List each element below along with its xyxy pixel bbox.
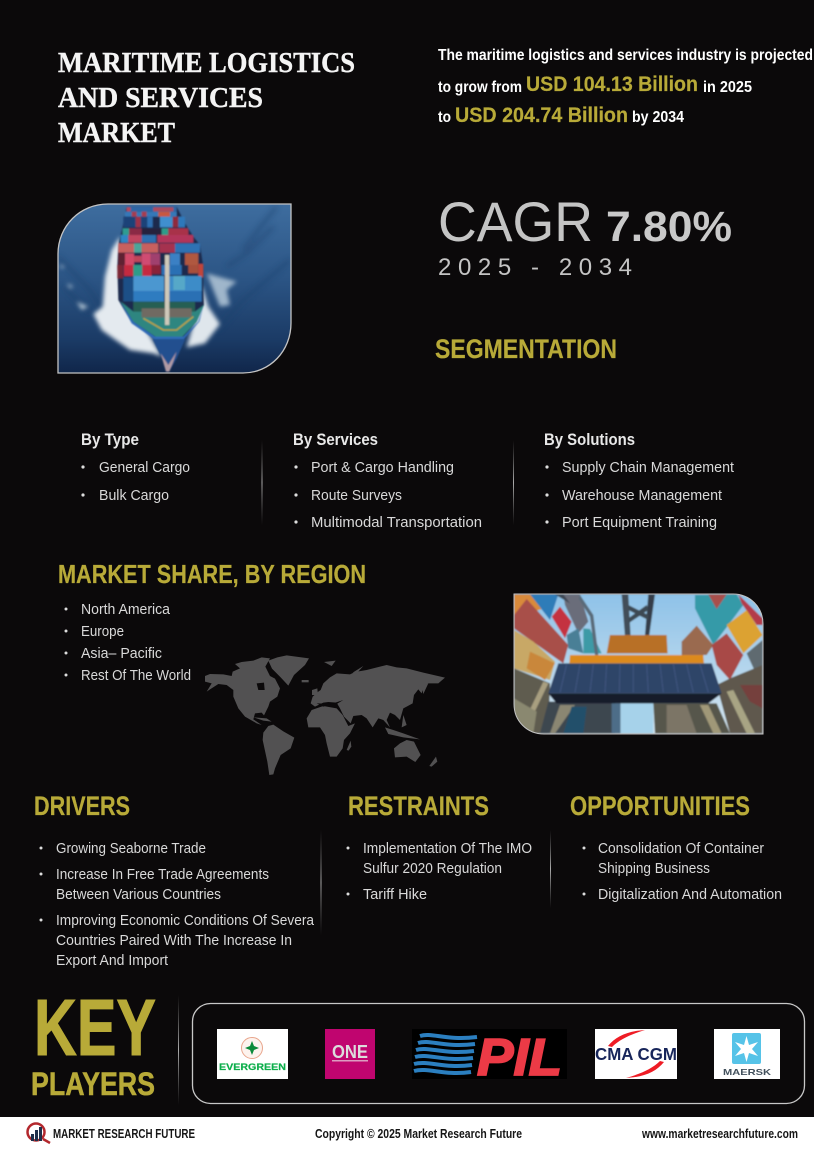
panel: opportunities (570, 791, 782, 903)
panel: restraints: RESTRAINTS (348, 791, 489, 821)
panel: restraints (346, 791, 532, 903)
segment: by services: Multimodal Transportation (311, 514, 482, 531)
logo: pil: PIL (477, 1029, 562, 1087)
panel: restraints: Tariff Hike (363, 886, 427, 903)
segment: by type: Bulk Cargo (99, 487, 169, 504)
segment: by type: By Type (81, 430, 139, 449)
title: MARITIME LOGISTICS (58, 48, 355, 79)
world map (205, 655, 445, 775)
market size summary text: in 2025 (703, 79, 752, 96)
panel: drivers: Export And Import (56, 952, 169, 969)
heading: market share by region: MARKET SHARE, BY REGION (58, 559, 366, 589)
heading: key players: KEY (34, 983, 156, 1072)
market size summary text: USD 204.74 Billion (455, 104, 628, 127)
panel: drivers: Countries Paired With The Increase In (56, 932, 292, 949)
region list: Europe (81, 623, 124, 640)
panel: drivers: DRIVERS (34, 791, 130, 821)
title (58, 48, 355, 149)
image: container crane (513, 594, 763, 734)
footer logo icon (28, 1124, 50, 1143)
market size summary text (438, 47, 813, 127)
logo: cma cgm: CMA CGM (595, 1044, 677, 1064)
logo: evergreen: EVERGREEN (219, 1062, 286, 1073)
segment: by type: General Cargo (99, 459, 190, 476)
region list: Asia– Pacific (81, 645, 162, 662)
region list (64, 601, 191, 684)
market size summary text: to grow from (438, 79, 522, 96)
footer (0, 1117, 814, 1150)
panel: opportunities: Shipping Business (598, 860, 710, 877)
market size summary text: by 2034 (632, 109, 684, 126)
panel: restraints: Sulfur 2020 Regulation (363, 860, 502, 877)
CAGR figure: 2025 - 2034 (438, 254, 632, 281)
logo: maersk: MAERSK (723, 1067, 772, 1077)
logo: cma cgm (595, 1029, 677, 1079)
segment: by solutions: Port Equipment Training (562, 514, 717, 531)
segment: by services: Port & Cargo Handling (311, 459, 454, 476)
panel: drivers: Improving Economic Conditions Of Severa (56, 912, 315, 929)
segment: by solutions: Warehouse Management (562, 487, 723, 504)
region list: Rest Of The World (81, 667, 191, 684)
image: container ship (58, 204, 291, 373)
logo: one: ONE (332, 1042, 368, 1062)
footer: Copyright © 2025 Market Research Future (315, 1127, 522, 1141)
segment: by type (81, 430, 190, 504)
heading: key players (31, 983, 156, 1102)
heading: key players: PLAYERS (31, 1066, 155, 1102)
segment: by services: By Services (293, 430, 378, 449)
logo: maersk (714, 1029, 780, 1079)
segment: by services (293, 430, 482, 531)
logo: pil (412, 1029, 567, 1087)
panel: opportunities: Consolidation Of Container (598, 840, 764, 857)
CAGR figure (438, 190, 732, 281)
segment: by solutions (544, 430, 735, 531)
footer: MARKET RESEARCH FUTURE (53, 1127, 195, 1141)
panel: drivers: Increase In Free Trade Agreements (56, 866, 269, 883)
logo: evergreen (217, 1029, 288, 1079)
segment: by solutions: By Solutions (544, 430, 635, 449)
heading: segmentation: SEGMENTATION (435, 334, 617, 364)
market size summary text: to (438, 109, 451, 126)
CAGR figure: 7.80% (606, 203, 732, 251)
panel: drivers: Growing Seaborne Trade (56, 840, 206, 857)
CAGR figure: CAGR (438, 190, 593, 253)
segment: by services: Route Surveys (311, 487, 402, 504)
market size summary text: USD 104.13 Billion (526, 73, 698, 96)
title: AND SERVICES (58, 83, 263, 114)
logo: one (325, 1029, 375, 1079)
panel: opportunities: OPPORTUNITIES (570, 791, 750, 821)
panel: key player logos (192, 1004, 804, 1104)
panel: drivers: Between Various Countries (56, 886, 221, 903)
panel: opportunities: Digitalization And Automation (598, 886, 782, 903)
region list: North America (81, 601, 171, 618)
panel: restraints: Implementation Of The IMO (363, 840, 532, 857)
title: MARKET (58, 118, 175, 149)
panel: drivers (34, 791, 315, 969)
segment: by solutions: Supply Chain Management (562, 459, 735, 476)
